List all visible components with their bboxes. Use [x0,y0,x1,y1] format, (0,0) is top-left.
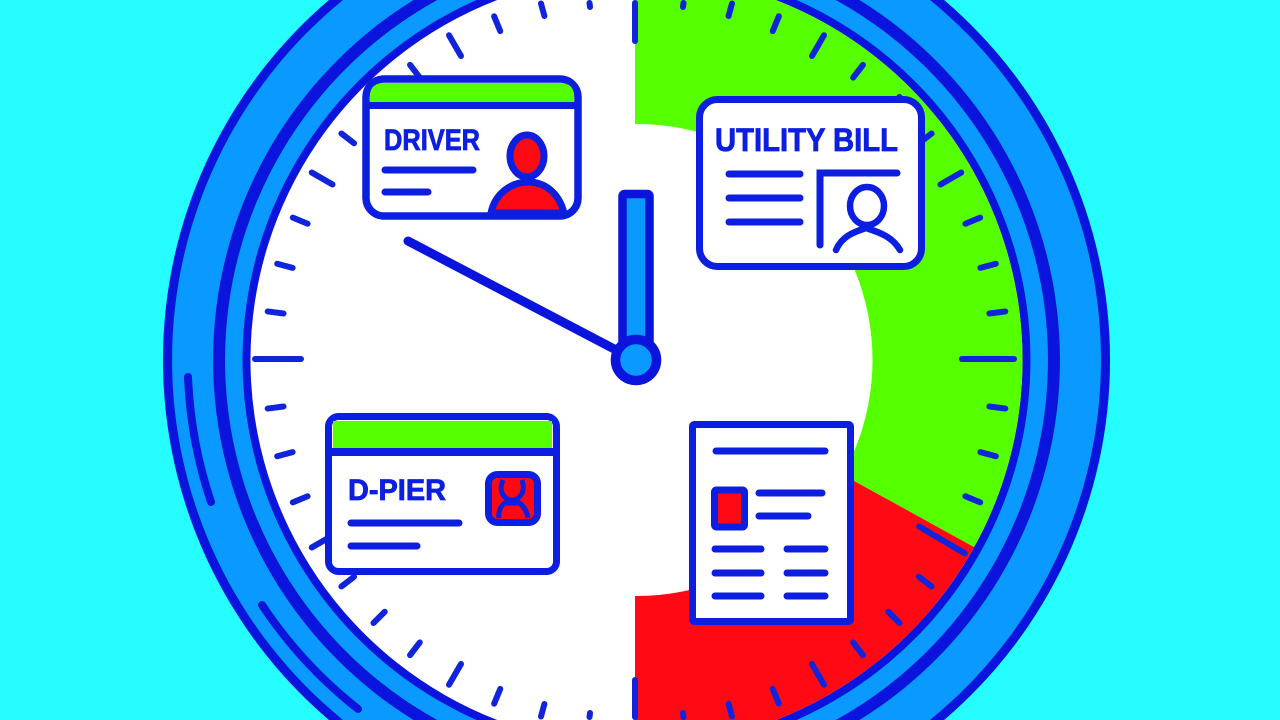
hour hand [408,241,618,351]
minute ticks [255,3,1014,717]
sheet body [692,424,850,622]
header divider [328,448,556,456]
document sheet [692,424,850,622]
clock outer ring line [163,0,1110,720]
inner white disc [400,124,872,596]
card title: UTILITY BILL [715,122,898,158]
clock [163,0,1110,720]
photo frame [820,173,897,245]
card body [700,100,922,266]
photo box [488,474,538,522]
text lines [351,523,459,546]
ring highlight lower left [262,605,358,709]
header divider [366,102,578,109]
text lines [385,170,473,192]
photo portrait [499,480,528,518]
clock inner ring band [225,0,1048,720]
driver licence card [366,79,578,216]
card body [366,79,578,216]
sheet heading line [716,448,825,454]
clock dial [250,0,1023,720]
card green header [370,83,574,102]
utility bill card [700,100,922,266]
portrait body [491,182,564,213]
card title: DRIVER [384,124,480,157]
clock outer ring band [172,0,1101,720]
minute hand [622,194,650,354]
card title: D-PIER [348,474,446,507]
table lines [715,549,825,596]
red time sector [635,360,974,720]
ring highlight left [188,377,211,502]
text lines [729,174,800,222]
photo square [714,490,744,527]
detail lines [759,493,822,516]
portrait head [850,187,884,225]
id card [328,416,556,572]
clock centre hub [616,340,656,380]
card body [328,416,556,572]
card green header [333,421,552,448]
dial edge line [243,0,1030,720]
clock middle ring line [213,0,1060,720]
portrait head [510,135,544,177]
green time sector [635,0,1022,547]
portrait shoulders [836,228,900,250]
